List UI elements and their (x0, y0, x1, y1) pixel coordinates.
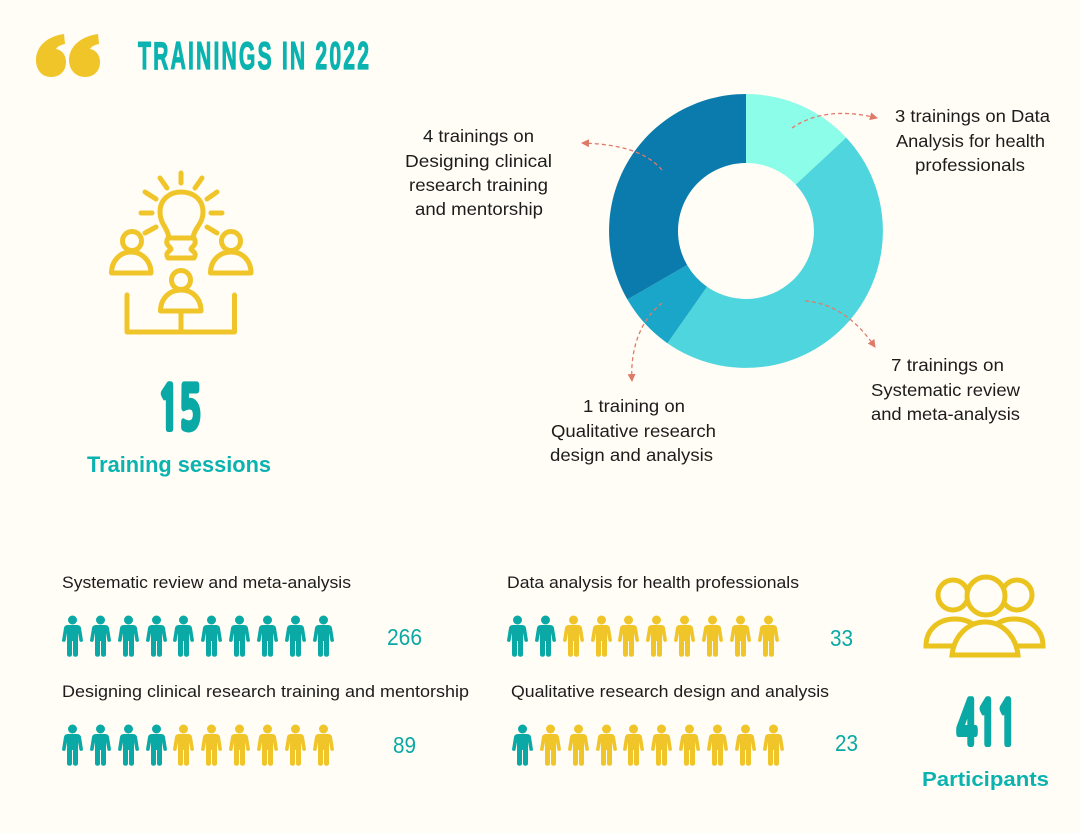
callout: designing clinical research (405, 126, 552, 219)
callout: designing clinical research: research training (409, 175, 548, 195)
pictogram: designing clinical research, 4 of 10 teal (62, 724, 334, 766)
callout: systematic review: Systematic review (871, 380, 1020, 400)
callout: data analysis: 3 trainings on Data (895, 106, 1050, 126)
label: qualitative research attendance: Qualitative research design and analysis (511, 683, 829, 701)
value: 266: 266 (387, 624, 422, 650)
value: 89: 89 (393, 732, 416, 758)
pictogram: systematic review, 10 of 10 teal (62, 616, 334, 657)
value: 33: 33 (830, 625, 853, 651)
arrow: qualitative research (632, 303, 662, 381)
label: data analysis attendance: Data analysis for health professionals (507, 574, 799, 592)
segment: designing clinical research (609, 94, 746, 300)
label: participants: Participants (922, 768, 1049, 791)
callout: designing clinical research: Designing clinical (405, 151, 552, 171)
big number: 15: 15 (158, 379, 201, 438)
big number: 411: 411 (957, 694, 1017, 753)
callout: data analysis: professionals (915, 155, 1025, 175)
pictogram: data analysis, 2 of 10 teal (507, 616, 779, 657)
callout: qualitative research: design and analysis (550, 445, 713, 465)
callout: qualitative research: 1 training on (583, 396, 685, 416)
callout: qualitative research (550, 396, 716, 465)
callout: data analysis: Analysis for health (896, 131, 1045, 151)
donut chart (609, 94, 883, 368)
label: designing clinical research attendance: Designing clinical research training and mentorship (62, 683, 469, 701)
segment: data analysis (746, 94, 846, 185)
callout: qualitative research: Qualitative research (551, 421, 716, 441)
segment: qualitative research (627, 265, 707, 343)
value: 23: 23 (835, 730, 858, 756)
label: training sessions: Training sessions (87, 452, 271, 477)
callout: systematic review: 7 trainings on (891, 355, 1004, 375)
callout: data analysis (895, 106, 1050, 175)
icon: quotation mark (36, 34, 100, 77)
icon: group of participants (926, 577, 1043, 655)
callout: systematic review (871, 355, 1020, 424)
icon: lightbulb and people (112, 173, 251, 332)
pictogram: qualitative research, 1 of 10 teal (512, 724, 784, 766)
title: TRAININGS IN 2022 (138, 34, 369, 78)
callout: designing clinical research: and mentorship (415, 199, 543, 219)
label: systematic review attendance: Systematic review and meta-analysis (62, 574, 351, 592)
arrow: data analysis (792, 113, 877, 128)
segment: systematic review (667, 138, 883, 368)
arrow: designing clinical research (582, 143, 662, 170)
arrow: systematic review (805, 301, 875, 347)
callout: designing clinical research: 4 trainings on (423, 126, 534, 146)
callout: systematic review: and meta-analysis (871, 404, 1020, 424)
